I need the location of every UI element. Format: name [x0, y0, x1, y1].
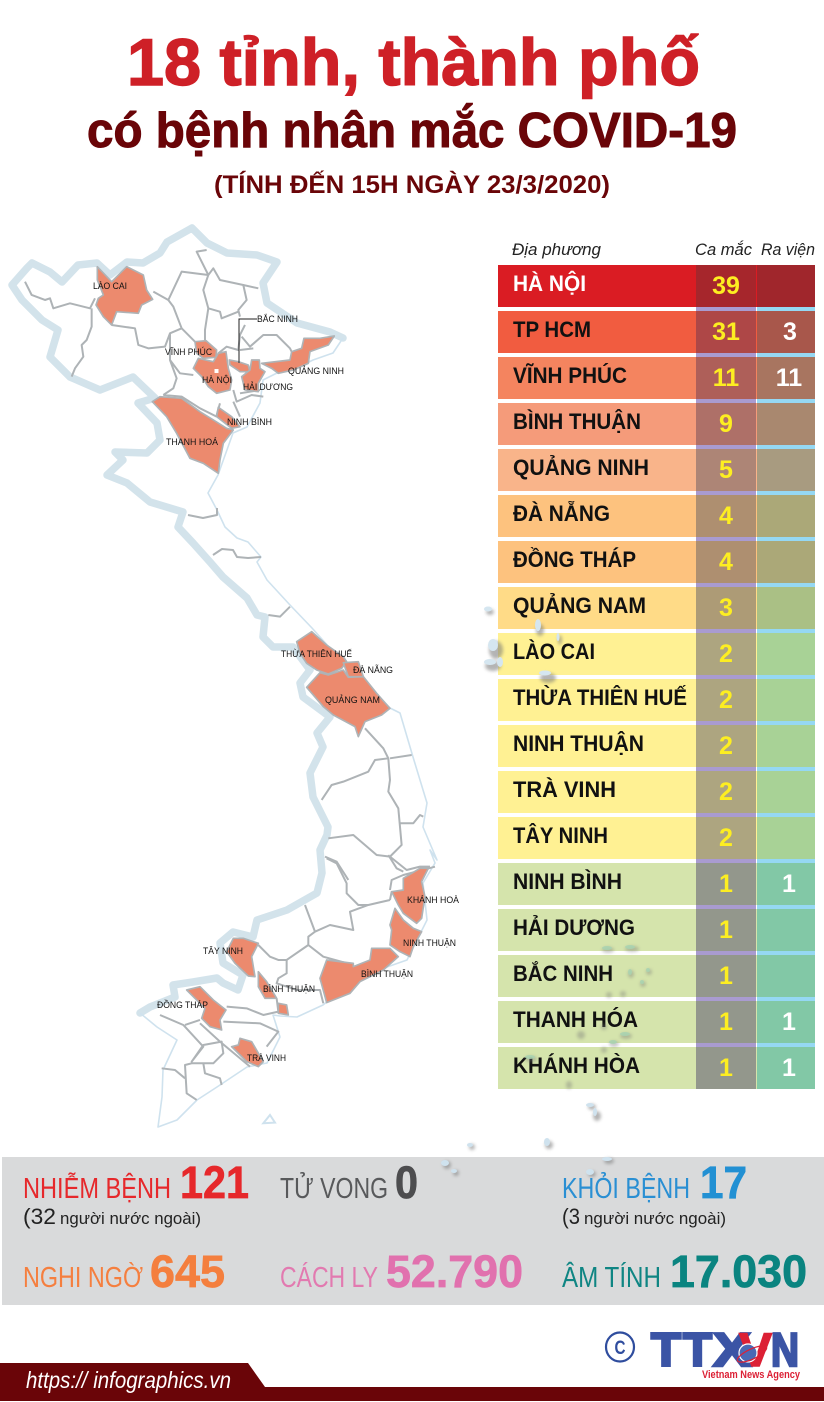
row: TP HCM: 3 — [783, 318, 797, 346]
row: Hà Nội: 39 — [712, 272, 740, 300]
row: Lào Cai: 2 — [719, 640, 733, 668]
stat: recovered — [562, 1157, 747, 1229]
province labels: ĐÀ NẴNG — [353, 664, 393, 675]
row: Thừa Thiên Huế: THỪA THIÊN HUẾ — [513, 685, 687, 710]
row: Đà Nẵng: 4 — [719, 502, 733, 530]
row: Ninh Bình: NINH BÌNH — [513, 869, 622, 894]
footer bar — [0, 1363, 824, 1401]
stat: infected: người nước ngoài) — [60, 1209, 201, 1228]
stat: recovered: người nước ngoài) — [584, 1209, 726, 1228]
map of Vietnam — [12, 228, 459, 1127]
row: Ninh Bình: 1 — [719, 870, 733, 898]
row: Bình Thuận — [498, 403, 815, 445]
stat: recovered: KHỎI BỆNH — [562, 1171, 690, 1205]
province labels: QUẢNG NINH — [288, 365, 344, 376]
TTXVN logo: Vietnam News Agency — [702, 1369, 801, 1381]
row: Quảng Nam — [498, 587, 815, 629]
row: TP HCM: 31 — [712, 318, 740, 346]
row: Trà Vinh: 2 — [719, 778, 733, 806]
stat: recovered: 17 — [700, 1157, 747, 1208]
row: Ninh Bình — [498, 863, 815, 905]
TTXVN logo: X — [713, 1323, 751, 1376]
row: Bình Thuận: 9 — [719, 410, 733, 438]
stat: quarantined — [280, 1246, 523, 1297]
row: Thừa Thiên Huế — [498, 679, 815, 721]
province labels: KHÁNH HOÀ — [407, 895, 459, 905]
row: Tây Ninh: 2 — [719, 824, 733, 852]
province labels: TÂY NINH — [203, 946, 243, 956]
highlighted central provinces — [297, 632, 390, 737]
offshore islands — [441, 606, 652, 1177]
Bac Ninh leader line — [239, 319, 257, 363]
statistics panel background — [2, 1157, 824, 1305]
province labels — [93, 281, 459, 1063]
southern province borders — [160, 855, 435, 1100]
highlighted southern provinces — [187, 868, 428, 1067]
stat: infected: (32 — [23, 1204, 56, 1229]
province labels: NINH BÌNH — [227, 417, 272, 427]
row: Quảng Ninh — [498, 449, 815, 491]
Hanoi marker — [214, 369, 218, 373]
stat: suspected: NGHI NGỜ — [23, 1261, 143, 1294]
row: Bình Thuận: BÌNH THUẬN — [513, 409, 641, 434]
row: Ninh Thuận — [498, 725, 815, 767]
highlighted northern provinces — [96, 267, 334, 473]
stat: suspected — [23, 1246, 225, 1297]
row: Đồng Tháp: ĐỒNG THÁP — [513, 547, 636, 572]
central province borders — [268, 607, 430, 880]
row: Trà Vinh: TRÀ VINH — [513, 777, 616, 802]
row: TP HCM — [498, 311, 815, 353]
province labels: BÌNH THUẬN — [361, 969, 413, 979]
table header: Ca mắc — [695, 240, 752, 259]
province labels: BẮC NINH — [257, 314, 298, 324]
row: Vĩnh Phúc: VĨNH PHÚC — [513, 363, 627, 388]
stat: infected: 121 — [180, 1157, 249, 1208]
copyright symbol: C — [614, 1338, 626, 1359]
row: Thừa Thiên Huế: 2 — [719, 686, 733, 714]
stat: negative: 17.030 — [670, 1246, 807, 1297]
row: Hà Nội — [498, 265, 815, 307]
eastern coastline — [140, 338, 437, 1127]
province labels: THỪA THIÊN HUẾ — [281, 649, 352, 659]
row: Đà Nẵng: ĐÀ NẴNG — [513, 501, 610, 526]
title — [87, 25, 737, 199]
table header: Địa phương — [512, 240, 602, 259]
central provinces — [268, 607, 430, 880]
stat: quarantined: CÁCH LY — [280, 1261, 378, 1294]
stat: negative: ÂM TÍNH — [562, 1261, 661, 1294]
row: Đà Nẵng — [498, 495, 815, 537]
Phu Quoc island — [263, 1115, 275, 1123]
stat: deaths — [280, 1157, 418, 1208]
row: Khánh Hòa: KHÁNH HÒA — [513, 1053, 640, 1078]
row: Lào Cai — [498, 633, 815, 675]
row: Vĩnh Phúc — [498, 357, 815, 399]
row: Ninh Bình: 1 — [782, 870, 796, 898]
row: Thanh Hóa: 1 — [782, 1008, 796, 1036]
row: Ninh Thuận: NINH THUẬN — [513, 731, 644, 756]
province labels: QUẢNG NAM — [325, 694, 380, 705]
row: Quảng Nam: 3 — [719, 594, 733, 622]
province labels: LÀO CAI — [93, 281, 127, 291]
northern provinces — [25, 250, 334, 473]
row: Quảng Ninh: QUẢNG NINH — [513, 455, 649, 480]
TTXVN logo: T — [651, 1323, 681, 1376]
western land border — [12, 228, 343, 1013]
statistics — [23, 1157, 807, 1297]
province labels: HÀ NỘI — [202, 375, 232, 385]
row: Quảng Ninh: 5 — [719, 456, 733, 484]
row: Hà Nội: HÀ NỘI — [513, 271, 586, 296]
TTXVN logo: V — [739, 1323, 773, 1376]
row: Vĩnh Phúc: 11 — [713, 364, 739, 392]
title: 18 tỉnh, thành phố — [127, 25, 700, 99]
row: Thanh Hóa: 1 — [719, 1008, 733, 1036]
title: (TÍNH ĐẾN 15H NGÀY 23/3/2020) — [214, 170, 610, 199]
row: Tây Ninh — [498, 817, 815, 859]
table of provinces — [498, 265, 815, 1089]
row: Bắc Ninh — [498, 955, 815, 997]
northern province borders — [25, 250, 292, 417]
province labels: TRÀ VINH — [247, 1053, 286, 1063]
north central province borders — [188, 508, 261, 558]
row: Thanh Hóa — [498, 1001, 815, 1043]
row: Khánh Hòa: 1 — [782, 1054, 796, 1082]
southern provinces — [160, 855, 435, 1123]
row: Hải Dương: 1 — [719, 916, 733, 944]
table header: Ra viện — [761, 240, 815, 259]
row: Quảng Nam: QUẢNG NAM — [513, 593, 646, 618]
row: Tây Ninh: TÂY NINH — [513, 823, 608, 848]
stat: infected — [23, 1157, 249, 1229]
row: Bắc Ninh: BẮC NINH — [513, 961, 613, 986]
row: Khánh Hòa — [498, 1047, 815, 1089]
row: Đồng Tháp — [498, 541, 815, 583]
row: Hải Dương — [498, 909, 815, 951]
Truong Sa islands — [441, 945, 652, 1177]
province labels: BÌNH THUẬN — [263, 984, 315, 994]
stat: suspected: 645 — [150, 1246, 225, 1297]
row: Thanh Hóa: THANH HÓA — [513, 1007, 638, 1032]
stat: quarantined: 52.790 — [386, 1246, 523, 1297]
footer bar: https:// infographics.vn — [26, 1367, 231, 1393]
stat: deaths: TỬ VONG — [280, 1171, 388, 1205]
province labels: NINH THUẬN — [403, 938, 456, 948]
row: Trà Vinh — [498, 771, 815, 813]
TTXVN logo: T — [683, 1323, 712, 1376]
Hoang Sa islands — [484, 606, 562, 683]
province labels: HẢI DƯƠNG — [243, 381, 293, 392]
stat: recovered: (3 — [562, 1204, 580, 1229]
row: Khánh Hòa: 1 — [719, 1054, 733, 1082]
copyright symbol — [606, 1332, 634, 1362]
table header — [512, 240, 815, 259]
province labels: THANH HOÁ — [166, 437, 218, 447]
row: Đồng Tháp: 4 — [719, 548, 733, 576]
province labels: ĐỒNG THÁP — [157, 999, 208, 1010]
stat: negative — [562, 1246, 807, 1297]
row: Bắc Ninh: 1 — [719, 962, 733, 990]
title: có bệnh nhân mắc COVID-19 — [87, 103, 737, 158]
row: TP HCM: TP HCM — [513, 317, 591, 342]
province labels: VĨNH PHÚC — [165, 347, 212, 357]
row: Vĩnh Phúc: 11 — [776, 364, 802, 392]
TTXVN logo: N — [771, 1323, 799, 1376]
stat: infected: NHIỄM BỆNH — [23, 1171, 171, 1205]
stat: deaths: 0 — [395, 1157, 418, 1208]
row: Ninh Thuận: 2 — [719, 732, 733, 760]
column gap tints — [696, 265, 815, 1089]
TTXVN logo — [651, 1323, 801, 1381]
row: Lào Cai: LÀO CAI — [513, 639, 595, 664]
row: Hải Dương: HẢI DƯƠNG — [513, 915, 635, 940]
